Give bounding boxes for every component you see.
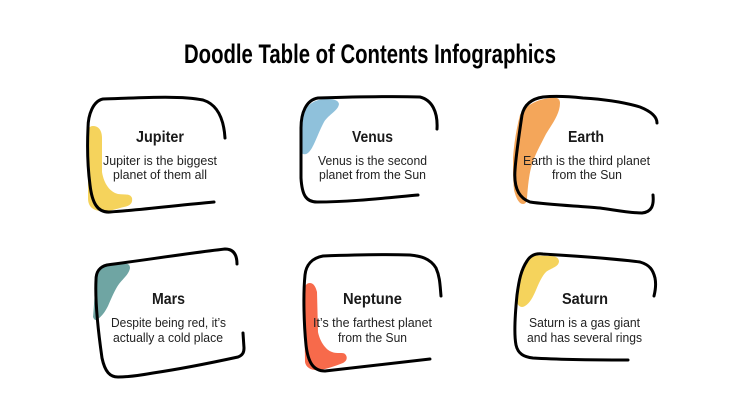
blob: Jupiter yellow	[88, 126, 132, 211]
blob: Earth orange	[513, 98, 560, 204]
description: Mars	[111, 316, 226, 345]
description: Neptune: It’s the farthest planet	[313, 316, 433, 330]
description: Earth	[523, 154, 651, 182]
panel: Neptune	[304, 255, 441, 371]
description: Saturn	[527, 316, 642, 345]
doodle frame: Neptune	[304, 255, 441, 371]
description: Venus	[318, 154, 427, 182]
title: Doodle Table of Contents Infographics	[184, 39, 556, 69]
label: Jupiter: Jupiter	[136, 129, 184, 146]
doodle frame: Earth	[515, 96, 657, 213]
description: Mars: actually a cold place	[113, 331, 223, 345]
panel: Jupiter	[88, 97, 225, 212]
panel: Mars	[93, 249, 244, 377]
description: Neptune: from the Sun	[338, 331, 407, 345]
blob: Venus blue	[301, 99, 339, 154]
panel: Saturn	[515, 254, 656, 360]
description: Neptune	[313, 316, 433, 345]
description: Jupiter	[103, 154, 218, 182]
label: Neptune: Neptune	[343, 291, 402, 308]
doodle frame: Saturn	[515, 254, 656, 360]
doodle frame: Mars	[96, 249, 244, 377]
description: Saturn: and has several rings	[527, 331, 642, 345]
doodle frame: Venus	[301, 97, 437, 202]
blob: Mars teal	[93, 264, 130, 320]
description: Earth: from the Sun	[552, 168, 622, 182]
description: Mars: Despite being red, it’s	[111, 316, 226, 330]
description: Jupiter: Jupiter is the biggest	[103, 154, 218, 168]
panel: Earth	[513, 96, 657, 213]
description: Jupiter: planet of them all	[113, 168, 207, 182]
label: Mars: Mars	[152, 291, 185, 308]
label: Earth: Earth	[568, 129, 604, 146]
blob: Neptune red	[304, 283, 347, 370]
panel: Venus	[301, 97, 437, 202]
description: Venus: planet from the Sun	[319, 168, 426, 182]
label: Saturn: Saturn	[562, 291, 608, 308]
doodle frame: Jupiter	[88, 97, 225, 212]
description: Venus: Venus is the second	[318, 154, 427, 168]
description: Saturn: Saturn is a gas giant	[529, 316, 641, 330]
label: Venus: Venus	[352, 129, 393, 146]
blob: Saturn yellow	[517, 256, 559, 307]
description: Earth: Earth is the third planet	[523, 154, 651, 168]
